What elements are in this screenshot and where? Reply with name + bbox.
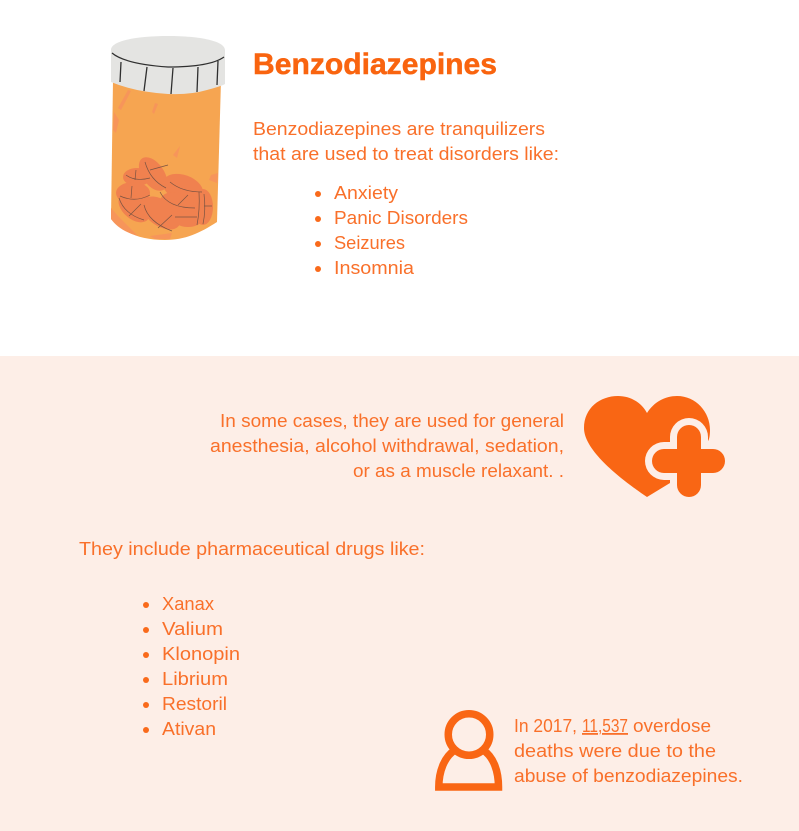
text block: definition: [253, 119, 559, 164]
text block: other uses: anesthesia, alcohol withdrawal, sedation,: [210, 436, 564, 456]
text block: definition: that are used to treat disorders like:: [253, 144, 559, 164]
list: drugs: Valium: [162, 619, 223, 639]
list: disorders: Seizures: [334, 233, 405, 253]
text block: other uses: [210, 411, 564, 481]
list: drugs: Klonopin: [162, 644, 240, 664]
list: drugs: Ativan: [162, 719, 216, 739]
text block: overdose statistic: [514, 716, 743, 786]
list: disorders: [315, 183, 468, 278]
text block: overdose statistic: overdose: [633, 716, 711, 736]
list: drugs: Restoril: [162, 694, 227, 714]
list: disorders: Insomnia: [334, 258, 415, 278]
list: disorders: Panic Disorders: [334, 208, 468, 228]
icon: heart with plus: [584, 396, 713, 497]
icon: person: [439, 714, 498, 787]
list: disorders: Anxiety: [334, 183, 398, 203]
text block: overdose statistic: In 2017,: [514, 716, 577, 736]
icon: pill bottle: [111, 36, 225, 240]
text block: overdose statistic: deaths were due to the: [514, 741, 716, 761]
text: drugs intro: They include pharmaceutical drugs like:: [79, 539, 425, 559]
title: Benzodiazepines: [253, 48, 497, 81]
list: drugs: Librium: [162, 669, 228, 689]
text block: definition: Benzodiazepines are tranquilizers: [253, 119, 545, 139]
text block: overdose statistic: 11,537: [582, 716, 628, 736]
panel: pink lower section: [0, 356, 799, 831]
text block: other uses: or as a muscle relaxant. .: [353, 461, 564, 481]
list: drugs: [143, 594, 240, 739]
text block: other uses: In some cases, they are used for general: [220, 411, 564, 431]
text block: overdose statistic: abuse of benzodiazepines.: [514, 766, 743, 786]
list: drugs: Xanax: [162, 594, 214, 614]
